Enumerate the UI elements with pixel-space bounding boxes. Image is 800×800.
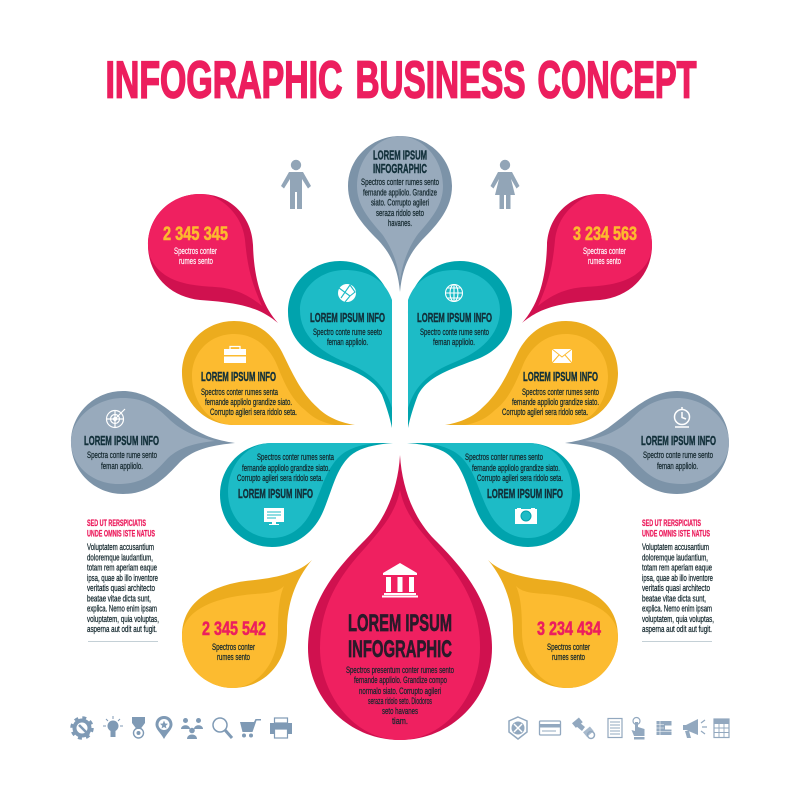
panel: yellow drop lower right xyxy=(488,560,618,688)
text block: left side note: Voluptatem accusantium xyxy=(87,542,154,552)
icon: camera xyxy=(515,508,537,524)
panel: teal drop upper left: LOREM IPSUM INFO xyxy=(310,311,385,325)
text block: right side note: doloremque laudantium, xyxy=(642,552,708,562)
icon: document xyxy=(608,718,622,738)
text block: left side note: totam rem aperiam eaque xyxy=(87,562,157,572)
panel: grey drop right: Spectro conte rume sento xyxy=(643,450,713,460)
icon: man xyxy=(281,160,311,209)
icon: wallet chip xyxy=(656,721,672,735)
text block: left side note xyxy=(87,518,159,642)
text block: right side note: veritatis quasi architecto xyxy=(642,583,710,593)
panel: red drop top left xyxy=(148,194,278,323)
icon: gear with wrench xyxy=(72,718,92,738)
panel: yellow drop upper right: fernande appliolo grandize siato. xyxy=(512,397,599,407)
panel: teal drop upper left xyxy=(288,261,392,428)
icon: clock xyxy=(674,407,690,427)
panel: grey top drop: LOREM IPSUM xyxy=(373,148,427,162)
panel: teal drop upper right: Spectro conte rume sento xyxy=(420,327,489,337)
panel: yellow drop upper left: Corrupto agileri sera ridolo seta. xyxy=(210,407,297,417)
icon: monitor xyxy=(264,508,284,525)
icon: printer xyxy=(270,718,292,738)
panel: yellow drop lower left: rumes sento xyxy=(217,652,250,662)
text block: left side note: UNDE OMNIS ISTE NATUS xyxy=(87,528,155,538)
panel: yellow drop lower right: rumes sento xyxy=(552,652,585,662)
icon: calculator xyxy=(714,719,729,738)
panel: grey drop right: LOREM IPSUM INFO xyxy=(641,434,716,448)
panel: red drop top left: 2 345 345 xyxy=(163,223,228,245)
panel: grey top drop: siato. Corrupto agileri xyxy=(371,198,429,208)
title: CONCEPT xyxy=(538,52,697,110)
panel: grey top drop: Spectros conter rumes sento xyxy=(361,177,439,187)
panel: red drop top left: rumes sento xyxy=(179,256,213,266)
panel: yellow drop lower left xyxy=(182,560,312,688)
panel: grey top drop: havanes. xyxy=(388,218,412,228)
panel: teal drop lower right: Spectros conter rumes sento xyxy=(465,452,543,462)
panel: grey top drop: fernande appliolo. Grandize xyxy=(363,188,437,198)
title xyxy=(106,52,697,110)
panel: teal drop upper left: feman appliolo. xyxy=(327,337,368,347)
text block: right side note: explica. Nemo enim ipsam xyxy=(642,604,712,614)
panel: yellow drop upper right: LOREM IPSUM INFO xyxy=(523,370,598,384)
panel: yellow drop upper left: fernande appliolo grandize siato. xyxy=(205,397,292,407)
icon: world network globe xyxy=(338,284,356,302)
panel: large red central drop: seto havanes xyxy=(382,706,418,716)
icon: bank building xyxy=(382,563,418,598)
icon: magnifier xyxy=(213,718,232,738)
text block: left side note: asperna aut odit aut fugit. xyxy=(87,624,157,634)
panel: teal drop lower left: fernande appliolo grandize siato. xyxy=(242,463,330,473)
text block: right side note: ipsa, quae ab illo inventore xyxy=(642,573,713,583)
panel: teal drop lower right: fernande appliolo grandize siato. xyxy=(472,463,560,473)
text block: right side note: voluptatem, quia voluptas, xyxy=(642,614,714,624)
text block: right side note: asperna aut odit aut fugit. xyxy=(642,624,712,634)
text block: right side note xyxy=(642,518,714,642)
icon: target with arrow xyxy=(106,409,125,428)
panel: yellow drop lower right: 3 234 434 xyxy=(537,618,601,640)
panel: large red central drop: fernande appliolo. Grandize compo xyxy=(354,675,447,685)
panel: grey drop right: feman appliolo. xyxy=(657,461,698,471)
panel: teal drop lower left: Spectros conter rumes senta xyxy=(257,452,334,462)
text block: right side note: beatae vitae dicta sunt, xyxy=(642,593,706,603)
panel: yellow drop lower right: Spectros conter xyxy=(547,642,590,652)
panel: yellow drop upper right: Spectros conter rumes sento xyxy=(522,387,599,397)
icon row: left xyxy=(72,716,292,739)
icon: megaphone xyxy=(683,719,707,738)
icon: envelope xyxy=(552,349,572,363)
panel: grey top drop xyxy=(348,136,452,292)
icon: shopping cart xyxy=(240,719,261,738)
text block: right side note: totam rem aperiam eaque xyxy=(642,562,712,572)
icon: medal xyxy=(132,717,145,738)
text block: left side note: explica. Nemo enim ipsam xyxy=(87,604,157,614)
panel: teal drop lower right: LOREM IPSUM INFO xyxy=(487,487,563,501)
icon: satellite xyxy=(572,717,594,738)
text block: right side note: SED UT RERSPICIATIS xyxy=(642,518,701,528)
panel: grey drop left xyxy=(71,391,235,494)
panel: teal drop upper left: Spectro conte rume seeto xyxy=(313,327,382,337)
panel: large red central drop: LOREM IPSUM xyxy=(348,610,452,637)
panel: red drop top right: rumes sento xyxy=(588,256,621,266)
title: BUSINESS xyxy=(356,52,526,110)
text block: left side note: doloremque laudantium, xyxy=(87,552,153,562)
panel: grey drop left: Spectra conte rume sento xyxy=(87,450,157,460)
panel: red drop top right: 3 234 563 xyxy=(573,223,637,245)
panel: large red central drop: tiam. xyxy=(392,716,408,726)
text block: left side note: veritatis quasi architecto xyxy=(87,583,155,593)
text block: right side note: UNDE OMNIS ISTE NATUS xyxy=(642,528,710,538)
panel: grey top drop: INFOGRAPHIC xyxy=(373,162,427,176)
icon row: right xyxy=(509,717,729,740)
panel: red drop top right xyxy=(522,194,652,323)
panel: grey drop left: LOREM IPSUM INFO xyxy=(84,434,159,448)
text block: left side note: SED UT RERSPICIATIS xyxy=(87,518,146,528)
icon: shield with tools xyxy=(509,717,527,739)
panel: teal drop lower right: Corrupto agileri sera ridolo seta. xyxy=(477,473,563,483)
text block: left side note: ipsa, quae ab illo inventore xyxy=(87,573,158,583)
panel: teal drop lower right xyxy=(407,443,580,547)
panel: red drop top right: Spectras conter xyxy=(583,246,626,256)
panel: yellow drop upper left: Spectros conter rumes senta xyxy=(201,387,278,397)
panel: grey drop right xyxy=(565,391,729,494)
panel: teal drop upper right xyxy=(408,261,512,428)
icon: woman xyxy=(490,160,520,209)
panel: large red central drop: normalo siato. Corrupto agileri xyxy=(359,686,441,696)
panel: large red central drop: seraza ridolo seto. Diodoros xyxy=(368,696,432,706)
icon: light bulb xyxy=(103,716,123,737)
panel: teal drop lower left: LOREM IPSUM INFO xyxy=(238,487,313,501)
title: INFOGRAPHIC xyxy=(106,52,342,110)
panel: teal drop lower left xyxy=(220,443,393,547)
text block: left side note: beatae vitae dicta sunt, xyxy=(87,593,151,603)
panel: red drop top left: Spectros conter xyxy=(174,246,217,256)
icon: credit card xyxy=(540,721,560,735)
panel: large red central drop xyxy=(308,455,492,740)
panel: large red central drop: INFOGRAPHIC xyxy=(348,636,452,663)
icon: globe xyxy=(446,284,462,302)
panel: yellow drop upper right xyxy=(445,321,618,425)
panel: yellow drop lower left: Spectros conter xyxy=(212,642,255,652)
panel: teal drop lower left: Corrupto agileri sera ridolo seta. xyxy=(237,473,323,483)
icon: team people xyxy=(181,718,203,739)
panel: yellow drop lower left: 2 345 542 xyxy=(202,618,266,640)
panel: teal drop upper right: LOREM IPSUM INFO xyxy=(417,311,492,325)
panel: grey top drop: seraza ridolo seto xyxy=(376,208,424,218)
panel: yellow drop upper right: Corrupto agileri sera ridolo seta. xyxy=(502,407,588,417)
panel: grey drop left: feman appliolo. xyxy=(101,461,143,471)
text block: right side note: Voluptatem accusantium xyxy=(642,542,709,552)
panel: yellow drop upper left: LOREM IPSUM INFO xyxy=(201,370,276,384)
icon: briefcase xyxy=(224,346,246,363)
panel: teal drop upper right: feman appliolo. xyxy=(433,337,475,347)
icon: hand touch xyxy=(632,718,644,740)
panel: large red central drop: Spectros presentum conter rumes sento xyxy=(346,665,454,675)
text block: left side note: voluptatem, quia voluptas, xyxy=(87,614,159,624)
icon: map pin with star xyxy=(156,716,172,739)
panel: yellow drop upper left xyxy=(182,321,355,425)
